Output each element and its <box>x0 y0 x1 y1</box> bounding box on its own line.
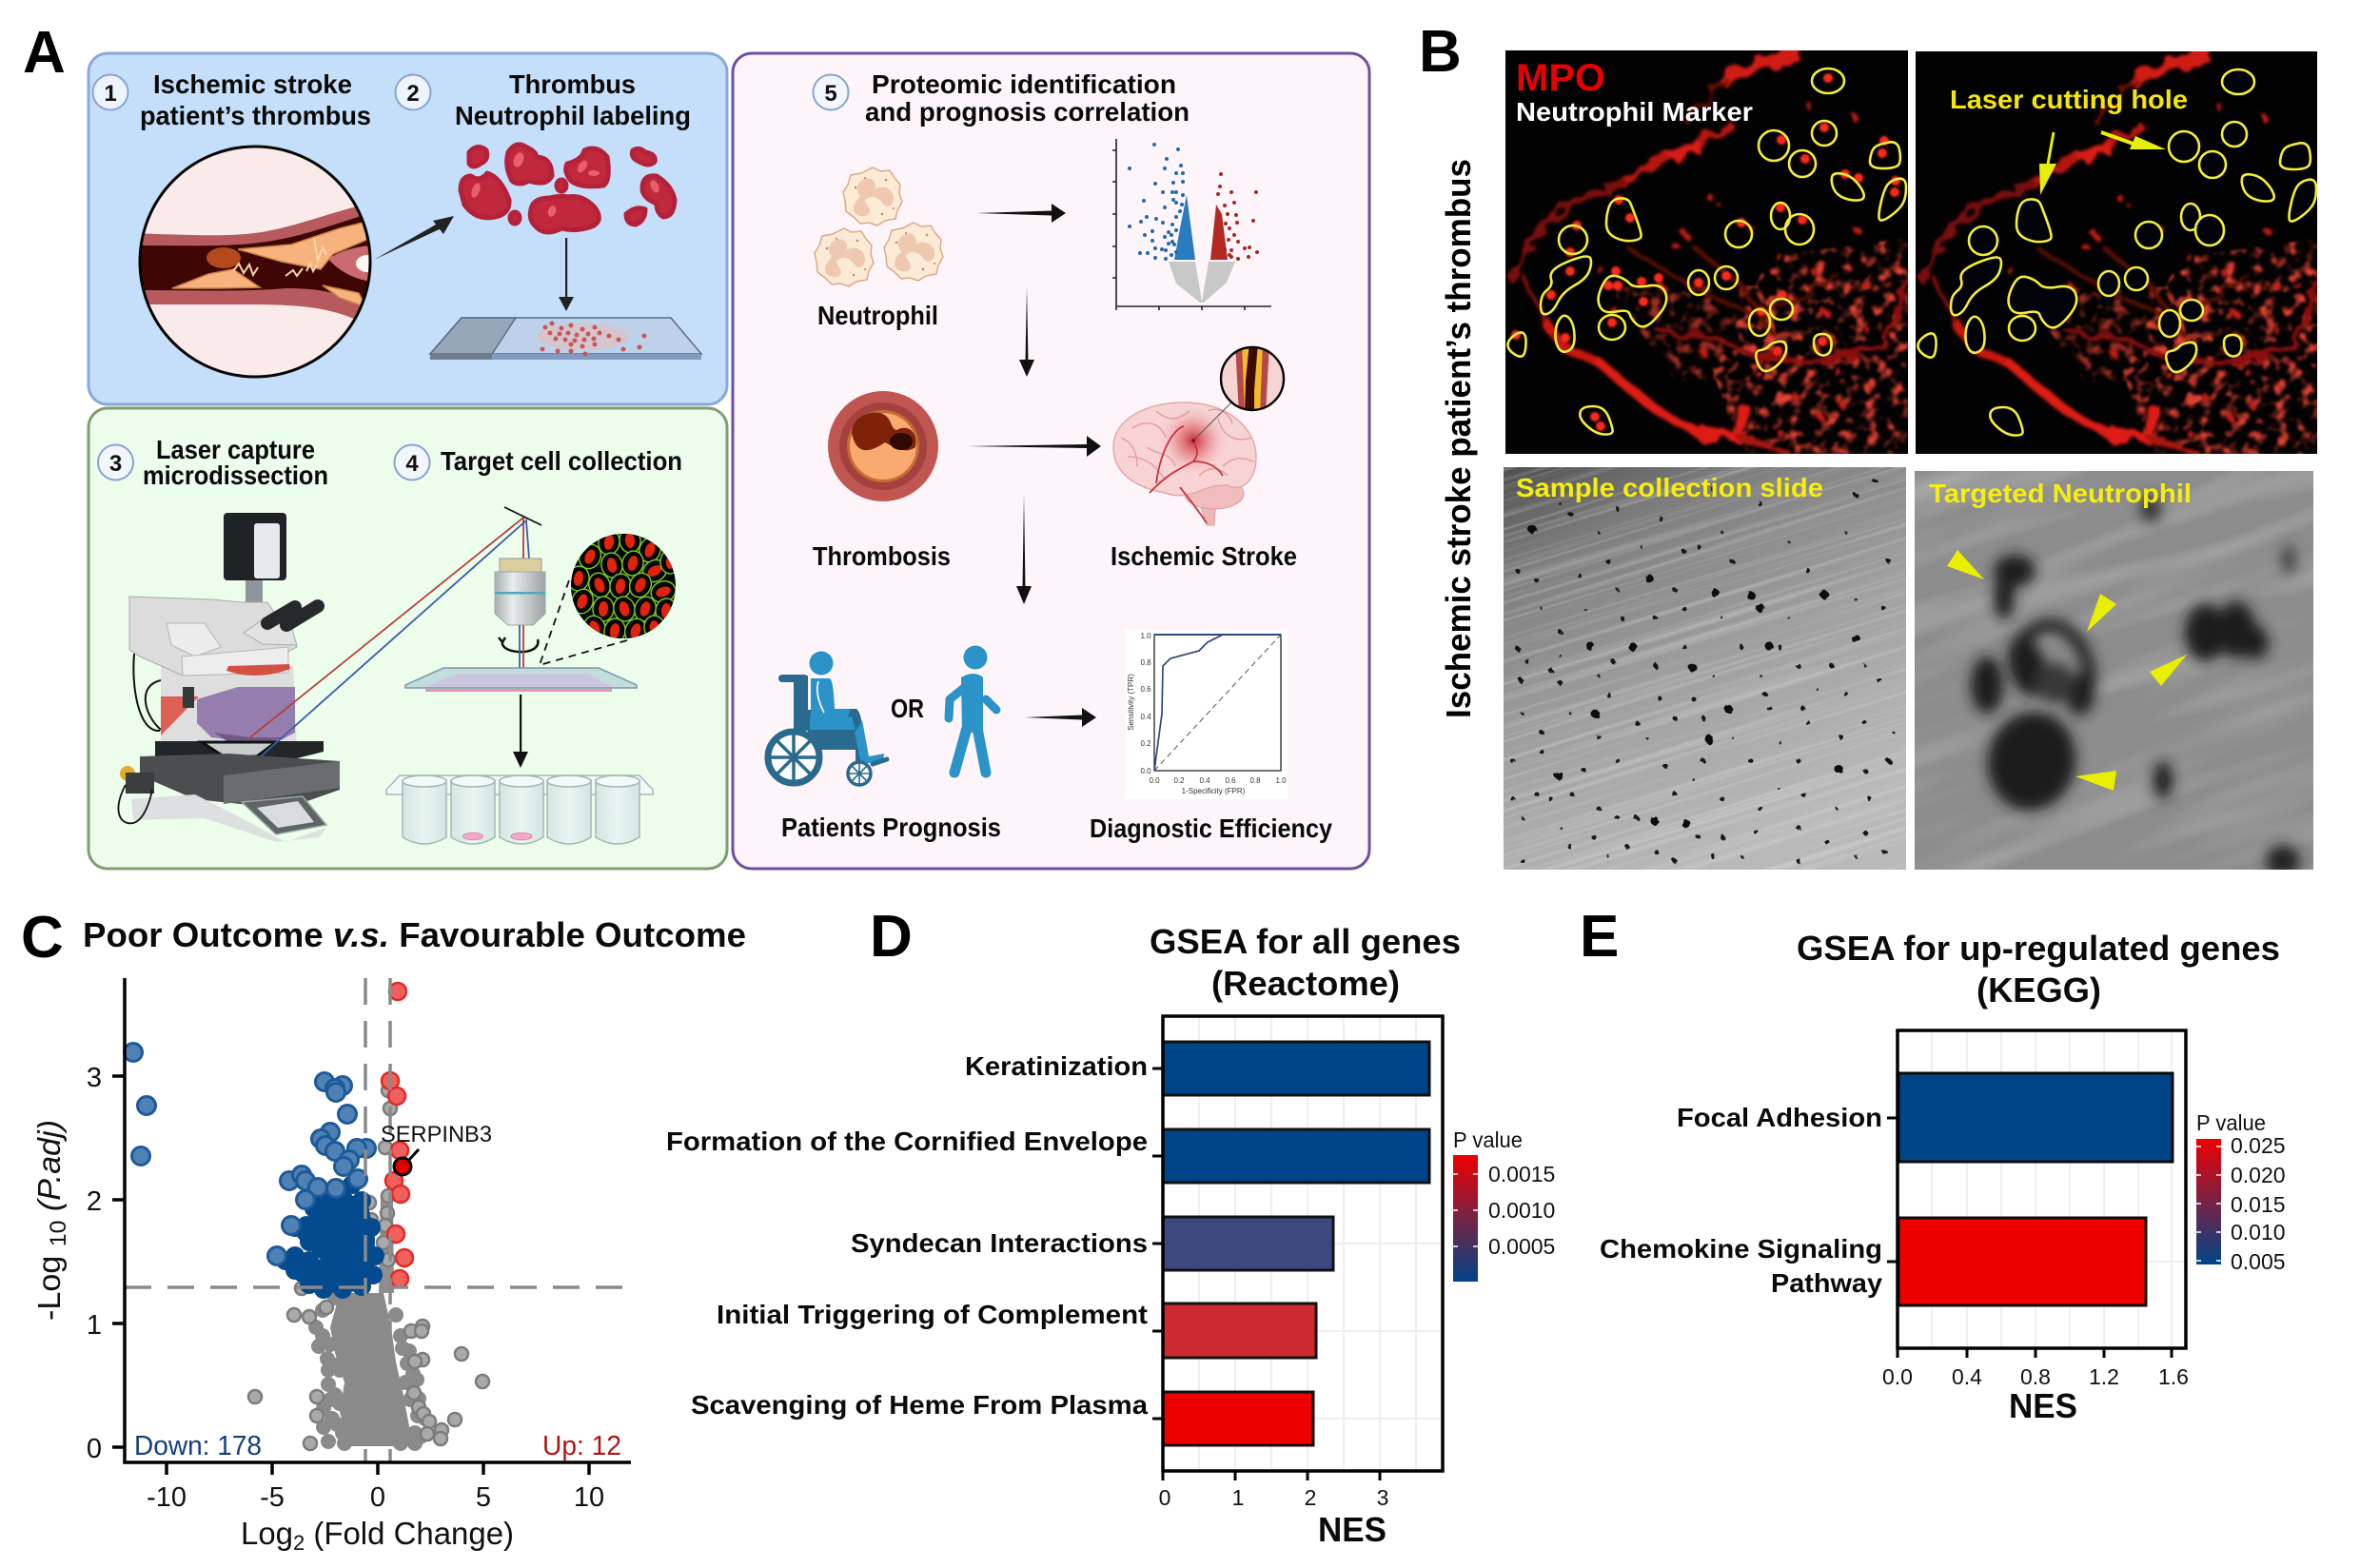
label: ischemic stroke: Ischemic Stroke <box>1111 541 1297 571</box>
panel label E: E <box>1580 904 1619 970</box>
legend: p value: 0.025 <box>2231 1133 2286 1158</box>
title: poor outcome vs favourable outcome: Poor Outcome v.s. Favourable Outcome <box>83 915 746 954</box>
y axis title: -Log <box>31 1258 67 1321</box>
heading: laser capture microdissection: Laser capture <box>156 435 315 464</box>
arrow: prognosis to diagnostic <box>1025 708 1096 727</box>
category labels: Keratinization <box>965 1051 1148 1081</box>
x tick labels: 0.0 <box>1882 1364 1913 1389</box>
title: GSEA for up-regulated genes: GSEA for up-regulated genes <box>1797 929 2280 968</box>
category labels: Focal Adhesion <box>1677 1103 1882 1132</box>
step number 3 <box>98 445 133 480</box>
icon: laser microdissection microscope <box>118 513 340 842</box>
neutrophil red spots <box>1516 78 1896 426</box>
down-regulated points <box>124 1043 384 1299</box>
y axis title: 10 <box>46 1221 71 1246</box>
heading: proteomic identification <box>865 69 1190 127</box>
icon: collection tube rack <box>386 775 653 844</box>
ROC curve chart: 0.6 <box>1225 776 1236 785</box>
category labels <box>1600 1103 1882 1298</box>
icon: brain with ischemic focus <box>1113 402 1256 525</box>
image: MPO fluorescence with contours <box>1505 50 1908 454</box>
heading: target cell collection: Target cell collection <box>441 446 682 476</box>
bar chart: reactome GSEA <box>666 1016 1555 1549</box>
label: neutrophil: Neutrophil <box>817 301 938 330</box>
legend: p value <box>1453 1127 1555 1282</box>
x axis title: Log <box>241 1516 293 1551</box>
step number 5: 5 <box>824 81 837 107</box>
label: MPO: MPO <box>1516 57 1605 99</box>
ROC curve chart: 0.0 <box>1149 776 1160 785</box>
step number 2: 2 <box>406 81 420 107</box>
ROC curve chart: Sensitivity (TPR) <box>1127 674 1135 731</box>
legend: p value: 0.0010 <box>1488 1198 1555 1223</box>
arrow: down to thrombosis row <box>1019 287 1034 377</box>
x axis title: NES: NES <box>2009 1386 2077 1425</box>
y tick labels: 2 <box>87 1186 102 1217</box>
heading: thrombus neutrophil labeling: Neutrophil labeling <box>455 101 691 130</box>
dark blurred cells <box>1971 496 2300 877</box>
count: down: Down: 178 <box>134 1431 262 1461</box>
bar: chemokine signaling <box>1898 1218 2146 1305</box>
mini volcano plot <box>1112 139 1271 310</box>
heading: laser capture microdissection <box>143 435 328 490</box>
title: GSEA for all genes: (Reactome) <box>1211 964 1400 1003</box>
arrow: clots to slide <box>559 238 574 311</box>
legend: p value: 0.0015 <box>1488 1162 1555 1186</box>
label: OR: OR <box>891 694 924 723</box>
ROC curve chart: 1-Specificity (FPR) <box>1182 787 1246 795</box>
highlighted gene SERPINB3: SERPINB3 <box>381 1122 492 1147</box>
ROC curve chart: 0.4 <box>1140 713 1151 721</box>
title: GSEA for all genes: GSEA for all genes <box>1150 922 1461 961</box>
icon: fluorescent cell inset <box>571 534 676 638</box>
icon: rotation arrow <box>499 637 538 652</box>
x tick labels: -5 <box>260 1482 285 1513</box>
x tick labels: 0 <box>1159 1485 1170 1510</box>
ROC curve chart <box>1126 630 1288 799</box>
y tick labels: 3 <box>87 1063 102 1093</box>
category labels: Pathway <box>1771 1268 1882 1298</box>
ROC curve chart: 0.0 <box>1140 767 1151 775</box>
x axis title: (Fold Change) <box>305 1516 514 1551</box>
category labels: Scavenging of Heme From Plasma <box>691 1390 1148 1420</box>
y axis title: (P.adj) <box>31 1120 67 1221</box>
heading: thrombus neutrophil labeling: Thrombus <box>509 69 636 99</box>
step number 1: 1 <box>104 81 117 107</box>
icon: glass slide with tissue <box>430 318 701 360</box>
bar chart: KEGG GSEA <box>1600 1030 2286 1425</box>
x tick labels: 3 <box>1377 1485 1388 1510</box>
legend: p value: P value <box>1453 1127 1523 1152</box>
label: sample collection slide: Sample collection slide <box>1516 473 1823 502</box>
step number 3: 3 <box>109 451 122 477</box>
x tick labels <box>1882 1364 2189 1389</box>
heading: ischemic stroke patient's thrombus: patient’s thrombus <box>140 101 371 130</box>
arrow: artery to clots <box>374 216 454 260</box>
label: diagnostic efficiency: Diagnostic Efficiency <box>1090 813 1332 843</box>
x axis title: 2 <box>293 1531 305 1555</box>
step number 4 <box>394 445 430 480</box>
x tick labels <box>147 1482 604 1513</box>
x axis title: NES: NES <box>1318 1510 1386 1549</box>
image: sample collection slide <box>1504 467 1906 870</box>
ROC curve chart: 0.2 <box>1173 776 1185 785</box>
arrow: slide to tubes <box>513 695 528 768</box>
ROC curve chart: 1.0 <box>1140 632 1151 640</box>
icon: thrombus fragments <box>461 145 675 232</box>
panel: steps 1 and 2 <box>88 53 727 404</box>
laser beams to slide <box>520 625 523 673</box>
ROC curve chart: 0.8 <box>1140 658 1151 667</box>
y tick labels: 1 <box>87 1310 102 1341</box>
label: patients prognosis: Patients Prognosis <box>781 813 1001 842</box>
heading: laser capture microdissection: microdissection <box>143 461 328 490</box>
heading: ischemic stroke patient's thrombus: Ischemic stroke <box>153 69 352 99</box>
x tick labels: 0 <box>370 1482 385 1513</box>
icon: membrane slide <box>405 668 637 692</box>
icon: walking person <box>949 645 996 773</box>
bar: complement <box>1163 1303 1316 1358</box>
arrow: neutrophil to volcano <box>976 204 1066 223</box>
title: GSEA for up-regulated genes: (KEGG) <box>1976 970 2101 1009</box>
y tick labels: 0 <box>87 1434 102 1464</box>
threshold lines <box>125 978 622 1462</box>
bar: syndecan <box>1163 1217 1333 1270</box>
heading: proteomic identification: Proteomic identification <box>872 69 1176 99</box>
step number 4: 4 <box>405 451 419 477</box>
legend: p value: P value <box>2196 1110 2266 1135</box>
legend: p value: 0.015 <box>2231 1192 2286 1217</box>
step number 5 <box>813 74 849 110</box>
x tick labels: 1.6 <box>2158 1364 2189 1389</box>
category labels: Chemokine Signaling <box>1600 1234 1882 1264</box>
category labels: Syndecan Interactions <box>851 1228 1148 1258</box>
step number 2 <box>396 74 430 110</box>
icon: artery with thrombus in magnifier <box>133 147 379 377</box>
arrow: laser hole down <box>2039 132 2056 195</box>
panel label A: A <box>23 20 66 86</box>
category labels <box>666 1051 1148 1420</box>
heading: ischemic stroke patient's thrombus <box>140 69 371 130</box>
icon: patient in wheelchair <box>768 651 887 785</box>
step number 1 <box>93 74 128 110</box>
label: laser cutting hole: Laser cutting hole <box>1950 85 2188 114</box>
dashed zoom lines <box>540 580 627 665</box>
legend: p value <box>2196 1110 2286 1274</box>
panel label B: B <box>1419 19 1462 85</box>
ROC curve chart: 0.2 <box>1140 739 1151 748</box>
ROC curve chart: 0.8 <box>1249 776 1261 785</box>
yellow arrowheads <box>1947 550 2187 791</box>
arrow: thrombosis to stroke <box>964 436 1101 457</box>
icon: objective lens <box>495 559 545 625</box>
volcano plot <box>31 978 631 1555</box>
legend: p value: 0.0005 <box>1488 1234 1555 1259</box>
x tick labels: 2 <box>1305 1485 1316 1510</box>
x tick labels: 5 <box>476 1482 491 1513</box>
icon: thrombosis cross section <box>828 391 938 501</box>
laser beams <box>250 518 529 756</box>
count: up: Up: 12 <box>542 1431 621 1461</box>
panel: steps 3 and 4 <box>88 408 727 869</box>
icon: neutrophils <box>815 167 943 286</box>
legend: p value: 0.020 <box>2231 1163 2286 1187</box>
panel: step 5 proteomics <box>733 53 1369 869</box>
legend: p value: 0.010 <box>2231 1220 2286 1245</box>
legend: p value: 0.005 <box>2231 1249 2286 1274</box>
icon: vessel inset <box>1221 343 1284 415</box>
label: thrombosis: Thrombosis <box>813 541 951 571</box>
x tick labels: -10 <box>147 1482 187 1513</box>
x tick labels: 10 <box>574 1482 604 1513</box>
arrow: laser hole right <box>2101 132 2166 149</box>
y tick labels <box>87 1063 102 1464</box>
x tick labels: 0.4 <box>1952 1364 1982 1389</box>
x tick labels: 1.2 <box>2089 1364 2119 1389</box>
bar: keratinization <box>1163 1042 1429 1095</box>
bar: focal adhesion <box>1898 1073 2173 1162</box>
category labels: Formation of the Cornified Envelope <box>666 1127 1148 1156</box>
up-regulated points <box>382 983 413 1287</box>
heading: proteomic identification: and prognosis correlation <box>865 97 1190 127</box>
highlighted gene SERPINB3 <box>381 1122 492 1175</box>
title: GSEA for up-regulated genes <box>1797 929 2280 1009</box>
heading: thrombus neutrophil labeling <box>455 69 691 130</box>
panel label C: C <box>21 905 64 970</box>
title: GSEA for all genes <box>1150 922 1461 1003</box>
image: MPO after laser cutting <box>1916 51 2318 455</box>
non-significant points <box>248 1084 489 1451</box>
label: neutrophil marker: Neutrophil Marker <box>1516 97 1753 127</box>
arrow: down to prognosis row <box>1016 495 1032 604</box>
ROC curve chart: 0.4 <box>1199 776 1210 785</box>
mirror <box>504 507 541 525</box>
x tick labels <box>1159 1485 1388 1510</box>
image: targeted neutrophil close-up <box>1915 471 2313 870</box>
ROC curve chart: 1.0 <box>1275 776 1287 785</box>
x tick labels: 1 <box>1232 1485 1244 1510</box>
bar: cornified envelope <box>1163 1129 1429 1183</box>
label: targeted neutrophil: Targeted Neutrophil <box>1929 479 2192 508</box>
axes <box>112 978 631 1475</box>
ROC curve chart: 0.6 <box>1140 685 1151 694</box>
bar: heme scavenging <box>1163 1392 1313 1445</box>
panel label D: D <box>870 904 913 970</box>
x tick labels: 0.8 <box>2020 1364 2051 1389</box>
category labels: Initial Triggering of Complement <box>717 1300 1148 1329</box>
rotated label: ischemic stroke patient's thrombus: Ischemic stroke patient’s thrombus <box>1439 159 1478 718</box>
